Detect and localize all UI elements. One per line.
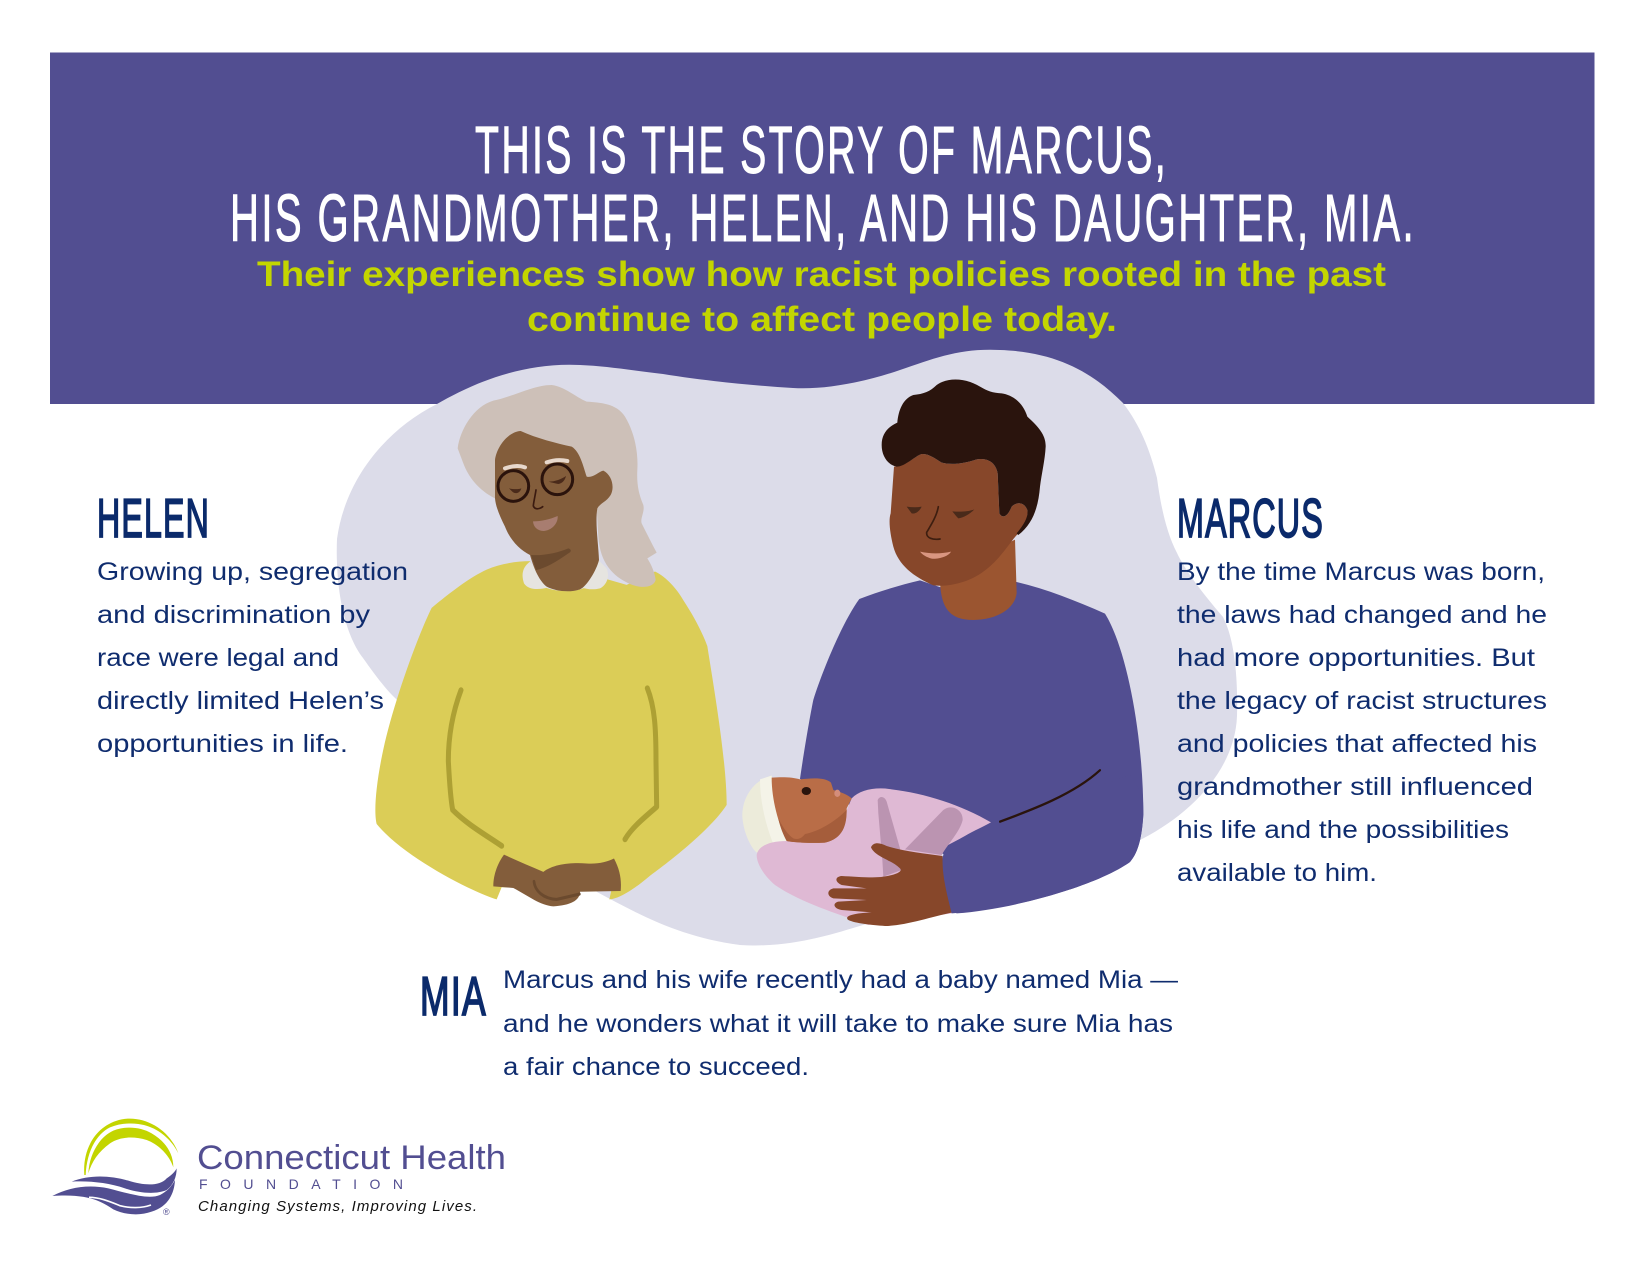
heading: Mia: MIA <box>420 965 487 1027</box>
Marcus torso and neck <box>800 540 1143 913</box>
logo foundation: FOUNDATION <box>199 1176 403 1192</box>
text block: Marcus <box>1177 558 1547 887</box>
title: THIS IS THE STORY OF MARCUS, <box>475 113 1168 188</box>
text block: Marcus: grandmother still influenced <box>1177 773 1533 801</box>
Helen sweater and hands <box>375 561 727 906</box>
text block: Helen: and discrimination by <box>97 601 371 629</box>
panel: Marcus <box>1177 487 1547 887</box>
heading: Marcus: MARCUS <box>1177 487 1324 549</box>
text block: Marcus: By the time Marcus was born, <box>1177 558 1545 586</box>
text block: Mia: a fair chance to succeed. <box>503 1053 809 1081</box>
text block: Helen <box>97 558 408 758</box>
text block: Marcus: the legacy of racist structures <box>1177 687 1547 715</box>
text block: Marcus: had more opportunities. But <box>1177 644 1535 672</box>
background blob <box>337 350 1237 945</box>
text block: Mia: and he wonders what it will take to make sure Mia has <box>503 1010 1173 1038</box>
icon: logo mark <box>52 1119 178 1214</box>
subtitle <box>257 255 1386 339</box>
baby Mia and Marcus hand <box>742 776 991 926</box>
text block: Marcus: his life and the possibilities <box>1177 816 1509 844</box>
text block: Mia <box>503 966 1178 1081</box>
heading: Helen: HELEN <box>97 487 210 549</box>
title <box>230 113 1416 256</box>
subtitle: Their experiences show how racist policies rooted in the past <box>257 255 1386 294</box>
text block: Helen: Growing up, segregation <box>97 558 408 586</box>
header banner <box>50 52 1594 404</box>
registered mark: ® <box>163 1207 170 1217</box>
illustration: Helen <box>375 385 727 906</box>
text block: Marcus: and policies that affected his <box>1177 730 1537 758</box>
logo: Connecticut Health Foundation <box>52 1119 506 1217</box>
text block: Mia: Marcus and his wife recently had a baby named Mia — <box>503 966 1178 994</box>
panel: Helen <box>97 487 408 758</box>
text block: Helen: opportunities in life. <box>97 730 348 758</box>
text block: Helen: directly limited Helen’s <box>97 687 384 715</box>
panel: Mia <box>420 965 1178 1081</box>
Marcus head <box>882 380 1046 586</box>
Helen head <box>458 385 657 591</box>
Marcus sleeve <box>943 770 1143 913</box>
subtitle: continue to affect people today. <box>527 300 1117 339</box>
text block: Helen: race were legal and <box>97 644 339 672</box>
text block: Marcus: the laws had changed and he <box>1177 601 1547 629</box>
text block: Marcus: available to him. <box>1177 859 1377 887</box>
logo name: Connecticut Health <box>197 1139 506 1177</box>
tagline: Changing Systems, Improving Lives. <box>198 1198 477 1215</box>
illustration: Marcus holding baby Mia <box>742 380 1143 926</box>
